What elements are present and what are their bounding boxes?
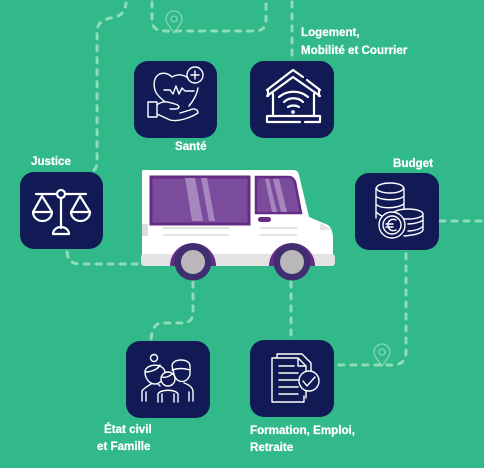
- dashed route: budget to right edge: [440, 220, 484, 222]
- tile: [355, 173, 439, 250]
- label: Logement, Mobilité et Courrier: Mobilité et Courrier: [301, 44, 408, 57]
- cab window reflections: [265, 179, 287, 212]
- icon: heart in hand: [148, 67, 203, 121]
- front light: [320, 223, 332, 230]
- van body: [142, 170, 333, 258]
- label: État civil et Famille: et Famille: [97, 440, 151, 453]
- dashed route: to housing tile: [290, 2, 294, 60]
- tile: [250, 340, 334, 417]
- icon: house with wifi: [267, 70, 320, 122]
- door handle: [258, 217, 271, 222]
- panel: Formation, Emploi, Retraite: [250, 340, 334, 417]
- tile: [250, 61, 334, 138]
- panel: Santé: [134, 61, 217, 138]
- rear window: [151, 177, 249, 224]
- cab window: [256, 177, 301, 213]
- label: Justice: Justice: [31, 155, 72, 168]
- rear light: [142, 224, 148, 236]
- icon: documents with check: [272, 354, 319, 402]
- tile: [134, 61, 217, 138]
- icon: scales: [33, 190, 90, 234]
- panel: Logement: [250, 61, 334, 138]
- dashed route: top loop: [152, 0, 266, 31]
- label: Logement, Mobilité et Courrier: Logement,: [301, 26, 360, 39]
- dashed route: justice to van: [67, 252, 141, 264]
- dashed route: justice to top: [94, 3, 126, 170]
- dashed route: budget to formation: [336, 254, 406, 365]
- dashed route: van to formation tile: [290, 282, 292, 340]
- icon: map pin top: [166, 11, 182, 33]
- panel: Budget: [355, 173, 439, 250]
- panel: État civil et Famille: [126, 341, 210, 418]
- label: Formation, Emploi, Retraite: Retraite: [250, 441, 294, 454]
- icon: euro coins: [376, 183, 423, 238]
- panel: Justice: [20, 172, 103, 249]
- label: État civil et Famille: État civil: [104, 423, 152, 436]
- tile: [126, 341, 210, 418]
- label: Formation, Emploi, Retraite: Formation, Emploi,: [250, 424, 355, 437]
- dashed route: van to family tile: [151, 282, 193, 340]
- label: Santé: Santé: [175, 140, 207, 153]
- van bumper: [141, 254, 335, 266]
- icon: family: [142, 354, 193, 402]
- label: Budget: Budget: [393, 157, 433, 170]
- icon: map pin bottom: [374, 344, 390, 366]
- front wheel: [269, 243, 315, 280]
- tile: [20, 172, 103, 249]
- rear window reflections: [185, 178, 215, 221]
- body lines: [163, 228, 297, 235]
- illustration: van: [141, 170, 335, 280]
- rear wheel: [170, 243, 216, 280]
